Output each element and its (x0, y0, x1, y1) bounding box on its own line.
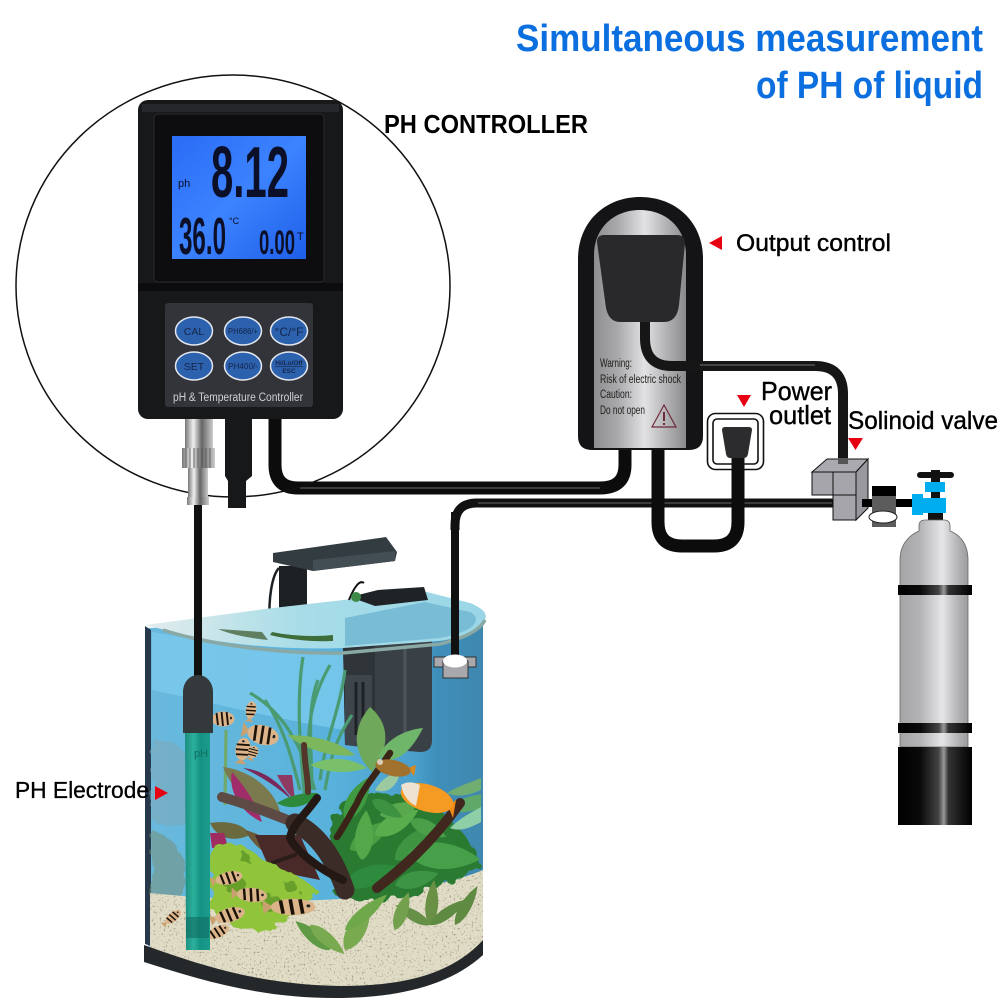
button labels: CAL (184, 326, 204, 338)
foreground plants on gravel (291, 880, 482, 959)
electrode head (183, 675, 213, 733)
label: solenoid valve (848, 407, 998, 450)
filter (343, 636, 432, 752)
button labels: PH400/- (228, 362, 258, 371)
LCD readings: 0.00 (259, 224, 295, 262)
power outlet (708, 414, 764, 470)
button panel (165, 303, 313, 407)
label: output control: Output control (736, 230, 891, 257)
driftwood (222, 745, 460, 890)
cylinder base (898, 747, 972, 825)
BNC connector (182, 418, 215, 505)
warning triangle (652, 405, 676, 427)
base (144, 940, 483, 998)
gas cylinder (898, 470, 972, 825)
buttons (176, 317, 308, 380)
yellow-green moss (210, 844, 320, 929)
controller to socket cable (275, 415, 625, 488)
warning text: Do not open (600, 405, 645, 417)
red plant (210, 767, 320, 880)
aquarium water (148, 615, 483, 986)
cylinder body (900, 520, 968, 747)
label: power outlet (737, 376, 832, 430)
LCD readings: 36.0 (179, 208, 226, 266)
label: PH controller: PH CONTROLLER (384, 109, 588, 139)
PH electrode: pH (194, 748, 208, 760)
output control box (578, 197, 843, 464)
label: power outlet: outlet (769, 400, 832, 430)
jack plug (225, 418, 252, 508)
output cable (645, 322, 843, 464)
controller body (138, 100, 343, 419)
regulator (862, 486, 914, 527)
button labels (184, 325, 304, 375)
controller magnifier circle (16, 75, 450, 497)
label: solenoid valve: Solinoid valve (848, 407, 998, 435)
LCD readings: 8.12 (211, 133, 289, 213)
loop cable to outlet (658, 448, 738, 546)
lighter water under lid (152, 632, 345, 730)
solenoid valve (812, 458, 868, 520)
warning text: Caution: (600, 389, 632, 401)
LCD readings (178, 133, 304, 266)
silver panel (594, 210, 686, 448)
gravel (150, 870, 483, 994)
title (516, 18, 983, 107)
LCD readings: T (297, 231, 304, 243)
aquarium (144, 537, 486, 998)
button labels: ESC (282, 368, 296, 375)
warning text: Warning: (600, 358, 632, 370)
screen bezel (154, 114, 324, 282)
LCD readings: °C (229, 216, 240, 226)
button labels: PH686/+ (228, 327, 258, 336)
filter unit on lid (350, 587, 428, 606)
fish (160, 700, 457, 944)
CO2 line cable (455, 503, 835, 530)
cables (275, 415, 835, 546)
PH electrode (183, 500, 213, 950)
model text: pH & Temperature Controller (173, 392, 303, 404)
lamp (273, 537, 397, 571)
gourami fish (374, 756, 416, 780)
button labels: Hi/Lo/Off (275, 360, 304, 367)
green plants (277, 707, 481, 894)
warning text: Risk of electric shock (600, 374, 681, 386)
LCD (172, 136, 306, 259)
lamp stem (279, 566, 307, 624)
cylinder valve (931, 470, 940, 500)
label: power outlet: Power (761, 376, 832, 406)
button labels: °C/°F (275, 325, 303, 339)
electrode cable (194, 500, 202, 678)
button labels: SET (184, 361, 205, 373)
faded background plants (152, 739, 197, 900)
glass lid (145, 591, 486, 648)
plug (597, 235, 685, 322)
PH controller (138, 100, 343, 508)
electrode tube (185, 733, 210, 950)
orange fish (397, 778, 457, 818)
warning text (600, 358, 681, 417)
sensor clip (434, 512, 476, 678)
label: PH electrode: PH Electrode (15, 777, 149, 803)
dark foliage mass (328, 793, 480, 901)
box casing (578, 197, 703, 450)
left tank edge (145, 626, 151, 946)
tall grass (225, 657, 352, 805)
cylinder bands (898, 585, 972, 595)
LCD readings: ph (178, 178, 190, 190)
